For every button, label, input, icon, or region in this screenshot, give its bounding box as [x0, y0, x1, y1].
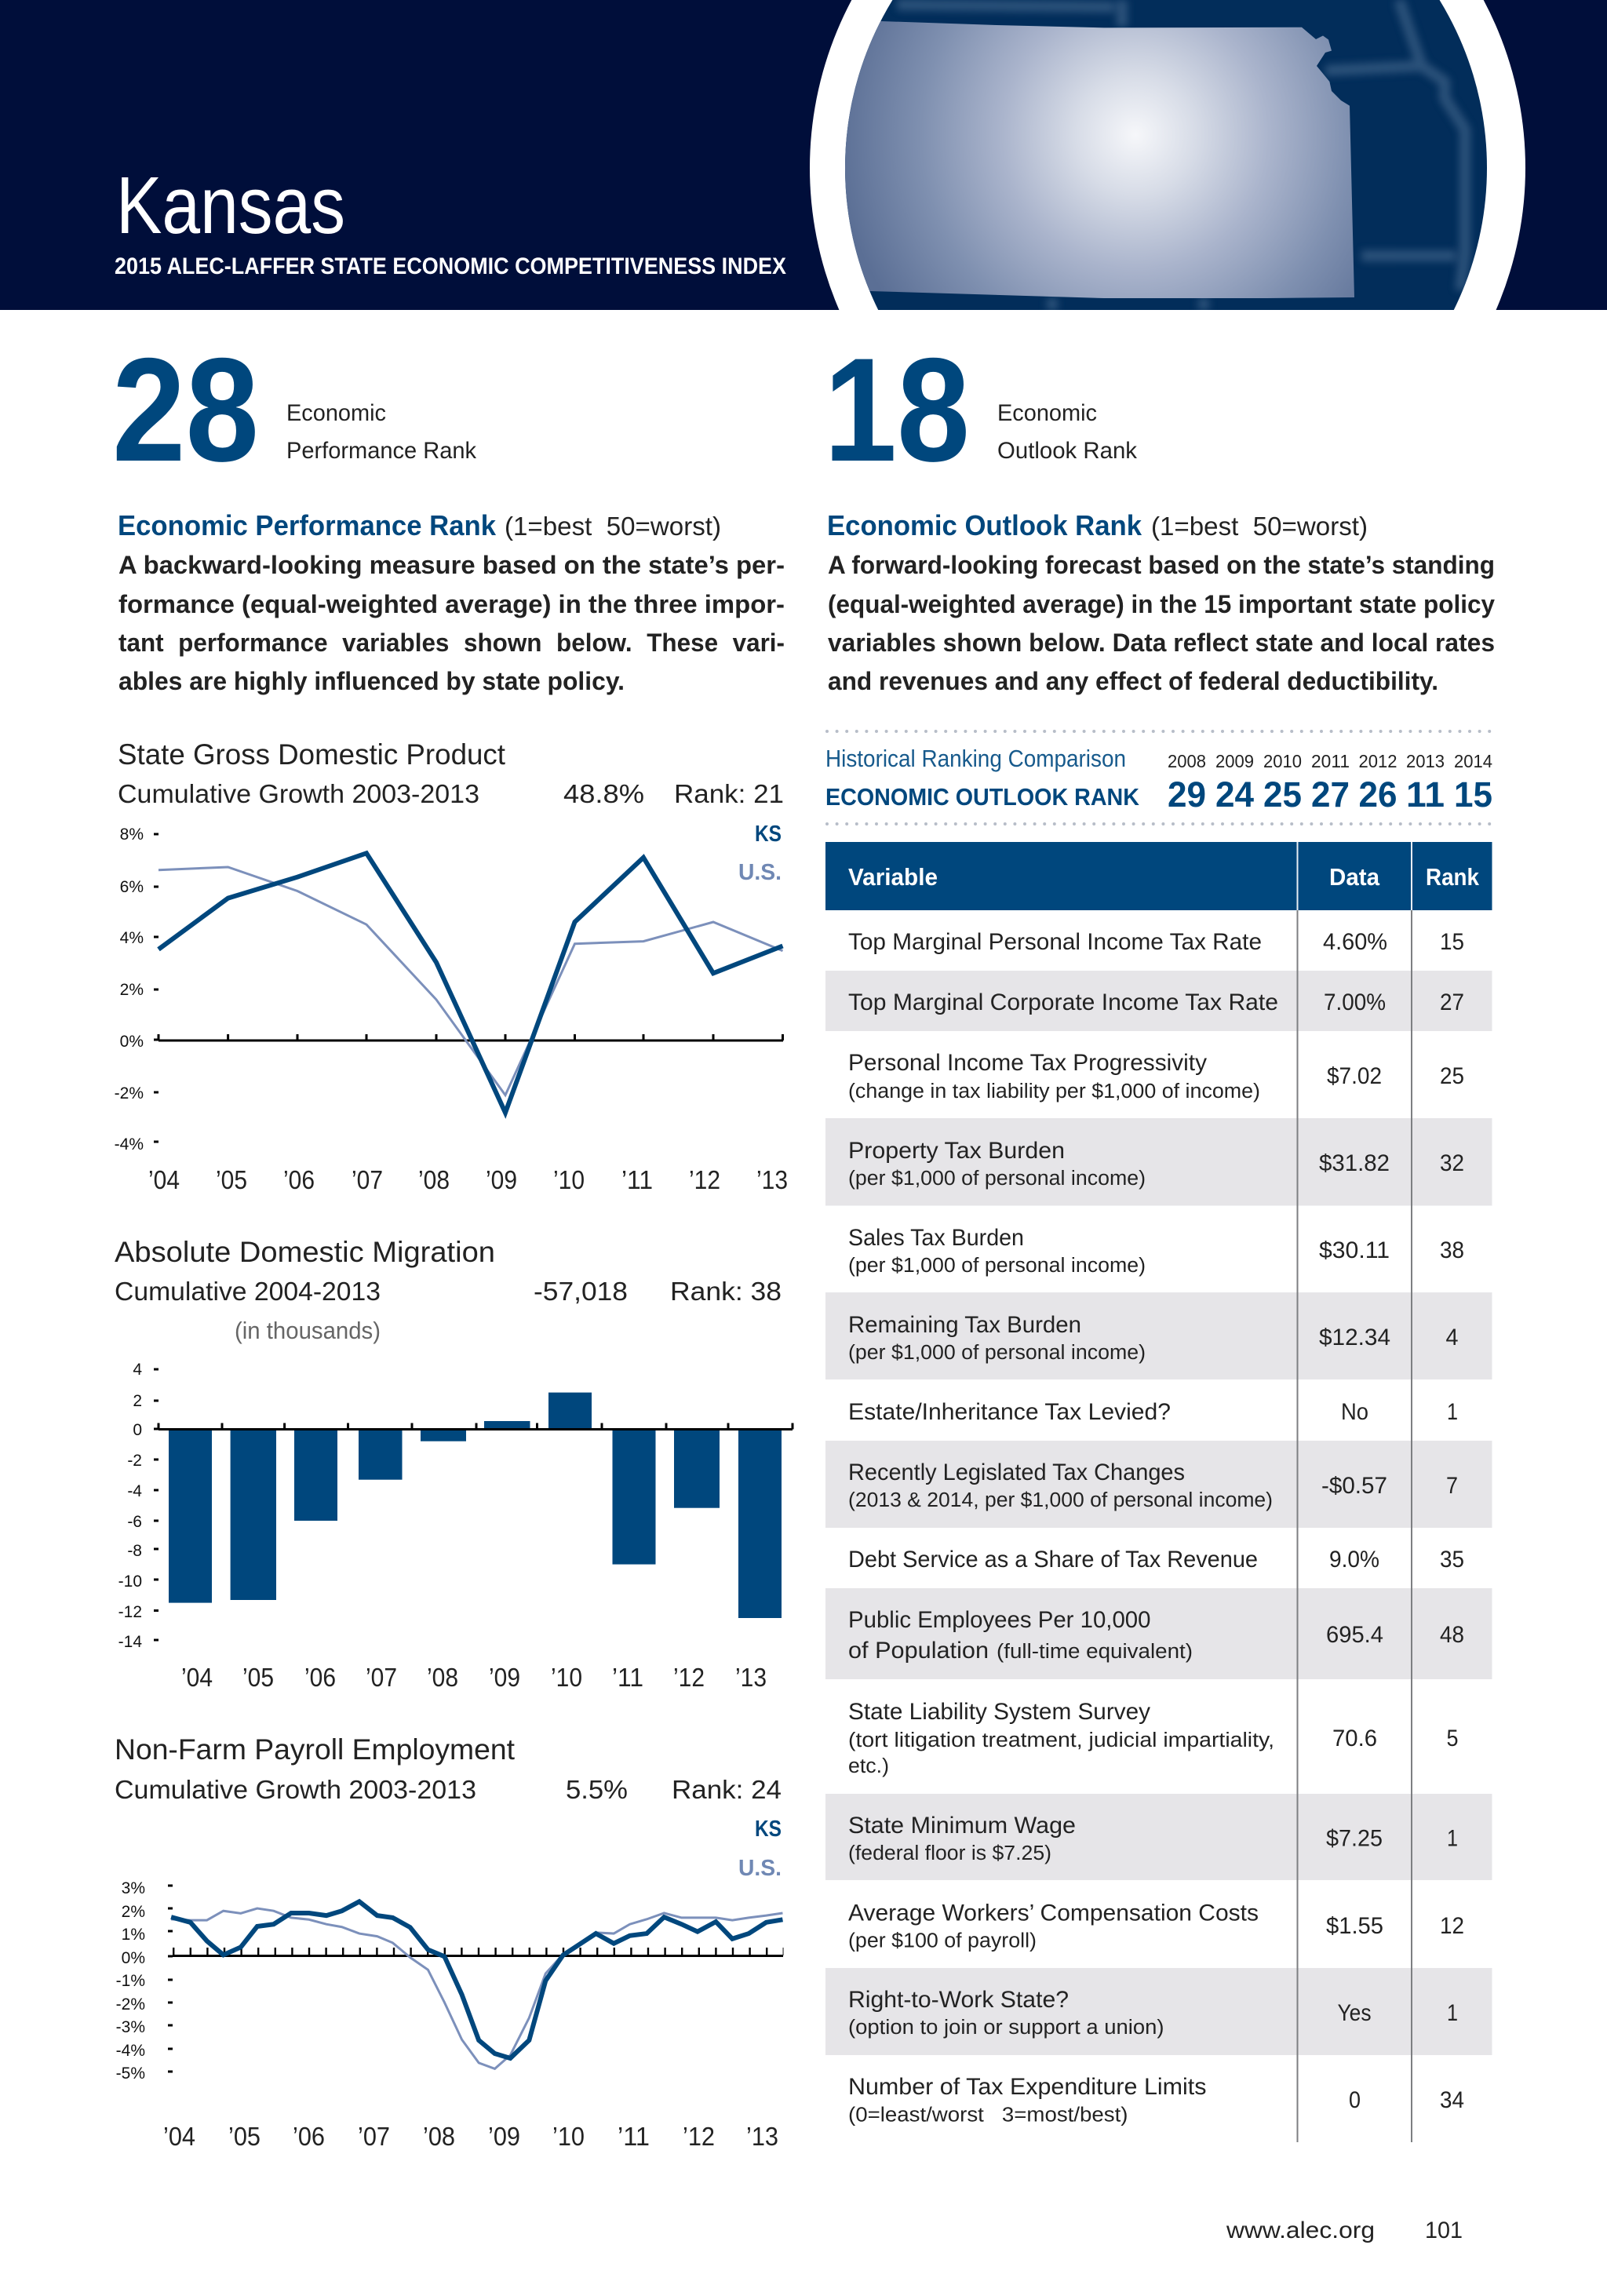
row: state liability system survey [848, 1699, 1458, 1777]
row: number of tax expenditure limits: 34 [1440, 2087, 1464, 2113]
line chart: GDP growth: 8% [120, 825, 144, 844]
years row: 2014 [1454, 751, 1492, 771]
row: remaining tax burden: (per $1,000 of personal income) [848, 1342, 1146, 1364]
bar chart: migration by year: ’06 [304, 1663, 336, 1692]
row: average workers' compensation costs: $1.55 [1326, 1913, 1383, 1939]
legend: KS and U.S. [738, 1817, 782, 1881]
row: property tax burden: $31.82 [1319, 1150, 1390, 1176]
panel: absolute domestic migration: -57,018 [534, 1277, 628, 1306]
years row: 2008 [1168, 751, 1206, 771]
table header: Data [1329, 863, 1380, 891]
row: number of tax expenditure limits: (0=least/worst 3=most/best) [848, 2105, 1128, 2127]
historical ranking comparison [825, 731, 1493, 824]
bar chart: migration by year: -14 [118, 1633, 142, 1651]
years row: 2009 [1215, 751, 1254, 771]
footer [1226, 2218, 1463, 2243]
line chart: payroll growth: ’08 [423, 2122, 455, 2151]
line chart: GDP growth: ’05 [216, 1165, 247, 1194]
rank: economic outlook: Economic [997, 400, 1097, 426]
row: remaining tax burden [848, 1312, 1458, 1364]
row: state minimum wage [848, 1813, 1458, 1864]
row: debt service as a share of tax revenue [848, 1547, 1464, 1573]
row: number of tax expenditure limits: Number of Tax Expenditure Limits [848, 2074, 1207, 2100]
line chart: payroll growth: -4% [116, 2042, 145, 2060]
legend: KS and U.S.: U.S. [738, 860, 782, 885]
row: public employees per 10,000: 695.4 [1326, 1622, 1383, 1648]
row: recently legislated tax changes: -$0.57 [1321, 1473, 1387, 1499]
rank: economic performance [112, 327, 477, 492]
row: state liability system survey: 5 [1447, 1726, 1458, 1751]
line chart: GDP growth: -4% [115, 1135, 144, 1153]
line chart: GDP growth: ’04 [148, 1165, 180, 1194]
row: top marginal personal income tax rate [848, 929, 1464, 955]
row: average workers' compensation costs: 12 [1440, 1913, 1464, 1939]
panel: non-farm payroll employment: 5.5% [566, 1775, 628, 1804]
row: state minimum wage: 1 [1447, 1825, 1458, 1852]
row: right-to-work state: 1 [1447, 2000, 1458, 2026]
text block: economic outlook description: Economic Outlook Rank [827, 509, 1142, 541]
line chart: payroll growth: ’05 [228, 2122, 261, 2151]
row: sales tax burden: (per $1,000 of personal income) [848, 1255, 1146, 1277]
panel: state gross domestic product: Rank: 21 [674, 779, 784, 808]
line chart: GDP growth: 6% [120, 878, 144, 896]
row: public employees per 10,000: (full-time equivalent) [997, 1641, 1193, 1663]
bar chart: migration by year: ’12 [673, 1663, 705, 1692]
row: top marginal corporate income tax rate: Top Marginal Corporate Income Tax Rate [848, 989, 1278, 1015]
line chart: GDP growth: 2% [120, 981, 144, 999]
panel: state gross domestic product: 48.8% [563, 779, 644, 808]
bar chart: migration by year: ’11 [612, 1663, 643, 1692]
row: average workers' compensation costs: (per $100 of payroll) [848, 1930, 1037, 1952]
row: top marginal corporate income tax rate [848, 989, 1464, 1015]
table: policy variables [825, 842, 1492, 2142]
table header [825, 842, 1492, 910]
rank: economic outlook [824, 327, 1138, 492]
line chart: GDP growth: ’09 [486, 1165, 517, 1194]
row: state minimum wage: State Minimum Wage [848, 1813, 1076, 1839]
row: sales tax burden: 38 [1440, 1237, 1464, 1263]
row: sales tax burden: $30.11 [1319, 1237, 1390, 1263]
ranks row: 26 [1359, 774, 1397, 815]
text block: economic performance description: ables are highly influenced by state policy. [118, 667, 625, 695]
row: recently legislated tax changes [848, 1460, 1458, 1511]
panel: absolute domestic migration [115, 1236, 793, 1692]
bar chart: migration by year [118, 1361, 793, 1692]
line chart: payroll growth: ’12 [683, 2122, 715, 2151]
historical ranking comparison: Historical Ranking Comparison [825, 745, 1126, 772]
line chart: GDP growth: 0% [120, 1033, 144, 1051]
historical ranking comparison: ECONOMIC OUTLOOK RANK [825, 783, 1140, 811]
row: sales tax burden [848, 1225, 1464, 1277]
row: property tax burden [848, 1138, 1464, 1190]
bar chart: migration by year: ’08 [427, 1663, 458, 1692]
line chart: payroll growth: -3% [116, 2018, 145, 2036]
text block: economic outlook description: and revenues and any effect of federal deductibility. [828, 667, 1438, 695]
text block: economic outlook description: (equal-weighted average) in the 15 important state policy [828, 590, 1495, 618]
line chart: payroll growth: ’07 [358, 2122, 390, 2151]
panel: absolute domestic migration: (in thousands) [235, 1317, 381, 1344]
bar chart: migration by year: -10 [118, 1573, 142, 1591]
row: top marginal corporate income tax rate: 27 [1440, 989, 1464, 1015]
rank: economic outlook: 18 [824, 327, 970, 492]
line chart: payroll growth: 0% [122, 1949, 145, 1967]
ranks row: 25 [1263, 774, 1302, 815]
row: debt service as a share of tax revenue: Debt Service as a Share of Tax Revenue [848, 1547, 1258, 1573]
footer: 101 [1425, 2218, 1463, 2243]
ranks row: 11 [1406, 774, 1445, 815]
text block: economic performance description: A backward-looking measure based on the state’s per- [118, 551, 785, 579]
row: personal income tax progressivity: (change in tax liability per $1,000 of income) [848, 1081, 1260, 1102]
panel: state gross domestic product: Cumulative Growth 2003-2013 [118, 779, 479, 808]
years row: 2011 [1311, 751, 1350, 771]
line chart: GDP growth: ’06 [283, 1165, 315, 1194]
row: personal income tax progressivity [848, 1050, 1464, 1102]
row: top marginal personal income tax rate: Top Marginal Personal Income Tax Rate [848, 929, 1262, 955]
row: top marginal personal income tax rate: 4.60% [1323, 929, 1387, 955]
text block: economic performance description: tant performance variables shown below. These vari- [118, 629, 785, 657]
years row [1168, 751, 1492, 771]
bar chart: migration by year: 2 [133, 1392, 142, 1410]
legend: KS and U.S.: U.S. [738, 1856, 782, 1881]
legend: KS and U.S.: KS [755, 822, 782, 847]
panel: state gross domestic product: State Gross Domestic Product [118, 738, 506, 771]
rank: economic performance: Economic [286, 400, 386, 426]
row: average workers' compensation costs [848, 1901, 1464, 1952]
text block: economic performance description [118, 509, 785, 695]
row: state liability system survey: (tort litigation treatment, judicial impartiality, [848, 1729, 1274, 1751]
panel: non-farm payroll employment [115, 1733, 783, 2151]
rank: economic performance: Performance Rank [286, 438, 477, 464]
text block: economic outlook description: (1=best 50=worst) [1151, 512, 1368, 541]
row: estate/inheritance tax levied: 1 [1447, 1399, 1458, 1425]
header banner [0, 0, 1607, 310]
line chart: payroll growth: 3% [122, 1879, 145, 1897]
line chart: payroll growth: -2% [116, 1995, 145, 2014]
line chart: payroll growth: 1% [122, 1926, 145, 1944]
line chart: payroll growth [116, 1879, 783, 2151]
line chart: payroll growth: ’06 [293, 2122, 325, 2151]
line chart: GDP growth: ’13 [756, 1165, 788, 1194]
legend: KS and U.S.: KS [755, 1817, 782, 1842]
text block: economic outlook description: A forward-looking forecast based on the state’s standing [828, 551, 1495, 579]
panel: absolute domestic migration: Rank: 38 [670, 1277, 782, 1306]
row: personal income tax progressivity: 25 [1440, 1063, 1464, 1089]
line chart: GDP growth: ’12 [689, 1165, 720, 1194]
years row: 2013 [1406, 751, 1445, 771]
bar chart: migration by year: ’09 [489, 1663, 520, 1692]
footer: www.alec.org [1226, 2218, 1375, 2243]
rank: economic outlook: Outlook Rank [997, 438, 1138, 464]
line chart: payroll growth: ’10 [552, 2122, 585, 2151]
rank: economic performance: 28 [112, 327, 259, 492]
years row: 2010 [1263, 751, 1302, 771]
line chart: GDP growth: -2% [115, 1084, 144, 1102]
line chart: payroll growth: ’09 [488, 2122, 520, 2151]
row: average workers' compensation costs: Average Workers’ Compensation Costs [848, 1901, 1259, 1926]
bar chart: migration by year: -12 [118, 1603, 142, 1621]
panel: non-farm payroll employment: Cumulative Growth 2003-2013 [115, 1775, 476, 1804]
panel: absolute domestic migration: Cumulative 2004-2013 [115, 1277, 381, 1306]
line chart: GDP growth: ’11 [621, 1165, 653, 1194]
bar chart: migration by year: ’04 [181, 1663, 213, 1692]
row: number of tax expenditure limits: 0 [1349, 2087, 1361, 2113]
bar chart: migration by year: 4 [133, 1361, 142, 1379]
subtitle: 2015 ALEC-LAFFER STATE ECONOMIC COMPETITIVENESS INDEX [115, 253, 786, 279]
panel: state gross domestic product [115, 738, 788, 1194]
row: public employees per 10,000: of Population [848, 1638, 989, 1664]
ranks row [1168, 774, 1492, 815]
line chart: payroll growth: ’04 [163, 2122, 195, 2151]
text block: economic outlook description: variables shown below. Data reflect state and local rates [828, 629, 1495, 657]
bar chart: migration by year: ’07 [366, 1663, 397, 1692]
row: recently legislated tax changes: Recently Legislated Tax Changes [848, 1460, 1185, 1485]
bar chart: migration by year: ’10 [551, 1663, 582, 1692]
ranks row: 24 [1215, 774, 1254, 815]
bar chart: migration by year: ’13 [735, 1663, 767, 1692]
table header: Variable [848, 863, 938, 891]
row: remaining tax burden: $12.34 [1319, 1325, 1390, 1350]
row: right-to-work state: Yes [1337, 2000, 1372, 2026]
row: estate/inheritance tax levied: No [1341, 1399, 1368, 1425]
map: Kansas state shape [816, 20, 1354, 298]
ranks row: 29 [1168, 774, 1206, 815]
bar chart: migration by year: -6 [127, 1513, 142, 1531]
line chart: payroll growth: ’13 [746, 2122, 778, 2151]
text block: economic outlook description [827, 509, 1495, 695]
row: property tax burden: Property Tax Burden [848, 1138, 1065, 1164]
row: debt service as a share of tax revenue: 35 [1440, 1547, 1464, 1573]
row: public employees per 10,000 [848, 1607, 1464, 1664]
panel: non-farm payroll employment: Rank: 24 [672, 1775, 782, 1804]
row: state liability system survey: State Liability System Survey [848, 1699, 1150, 1725]
row: remaining tax burden: Remaining Tax Burden [848, 1312, 1081, 1338]
line chart: GDP growth [115, 825, 788, 1194]
line chart: payroll growth: -5% [116, 2065, 145, 2083]
row: property tax burden: (per $1,000 of personal income) [848, 1168, 1146, 1190]
table header: Rank [1426, 863, 1480, 891]
line chart: GDP growth: 4% [120, 929, 144, 947]
bar chart: migration by year: -8 [127, 1542, 142, 1560]
row: estate/inheritance tax levied [848, 1399, 1458, 1425]
ranks row: 15 [1454, 774, 1492, 815]
row: recently legislated tax changes: (2013 & 2014, per $1,000 of personal income) [848, 1489, 1273, 1511]
title: Kansas [116, 160, 345, 250]
panel: absolute domestic migration: Absolute Domestic Migration [115, 1236, 495, 1268]
text block: economic performance description: (1=best 50=worst) [505, 512, 721, 541]
row: state liability system survey: etc.) [848, 1755, 889, 1777]
row: state minimum wage: $7.25 [1326, 1825, 1383, 1852]
row: public employees per 10,000: 48 [1440, 1622, 1464, 1648]
row: personal income tax progressivity: Personal Income Tax Progressivity [848, 1050, 1207, 1076]
ranks row: 27 [1311, 774, 1350, 815]
row: right-to-work state: (option to join or support a union) [848, 2017, 1164, 2039]
row: estate/inheritance tax levied: Estate/Inheritance Tax Levied? [848, 1399, 1171, 1425]
row: right-to-work state [848, 1987, 1458, 2039]
bar chart: migration by year: -4 [127, 1482, 142, 1500]
row: debt service as a share of tax revenue: 9.0% [1329, 1547, 1379, 1573]
row: property tax burden: 32 [1440, 1150, 1464, 1176]
line chart: payroll growth: 2% [122, 1903, 145, 1921]
line chart: GDP growth: ’08 [418, 1165, 450, 1194]
row: public employees per 10,000: Public Employees Per 10,000 [848, 1607, 1150, 1633]
line chart: payroll growth: ’11 [618, 2122, 650, 2151]
row: number of tax expenditure limits [848, 2074, 1464, 2127]
row: top marginal personal income tax rate: 15 [1440, 929, 1464, 955]
map medallion [810, 0, 1525, 310]
row: state minimum wage: (federal floor is $7.25) [848, 1842, 1051, 1864]
row: top marginal corporate income tax rate: 7.00% [1324, 989, 1386, 1015]
row: right-to-work state: Right-to-Work State? [848, 1987, 1069, 2013]
line chart: GDP growth: ’07 [352, 1165, 383, 1194]
row: personal income tax progressivity: $7.02 [1327, 1063, 1382, 1089]
bar chart: migration by year: ’05 [242, 1663, 274, 1692]
bar chart: migration by year: 0 [133, 1421, 142, 1439]
row: remaining tax burden: 4 [1445, 1325, 1458, 1350]
bar chart: migration by year: -2 [127, 1452, 142, 1470]
panel: non-farm payroll employment: Non-Farm Payroll Employment [115, 1733, 516, 1766]
line chart: payroll growth: -1% [116, 1972, 145, 1990]
row: state liability system survey: 70.6 [1332, 1726, 1377, 1751]
row: recently legislated tax changes: 7 [1446, 1473, 1458, 1499]
text block: economic performance description: Economic Performance Rank [118, 509, 497, 541]
row: sales tax burden: Sales Tax Burden [848, 1225, 1024, 1251]
years row: 2012 [1359, 751, 1397, 771]
legend: KS and U.S. [738, 822, 782, 885]
text block: economic performance description: formance (equal-weighted average) in the three impor- [118, 590, 785, 618]
line chart: GDP growth: ’10 [553, 1165, 585, 1194]
